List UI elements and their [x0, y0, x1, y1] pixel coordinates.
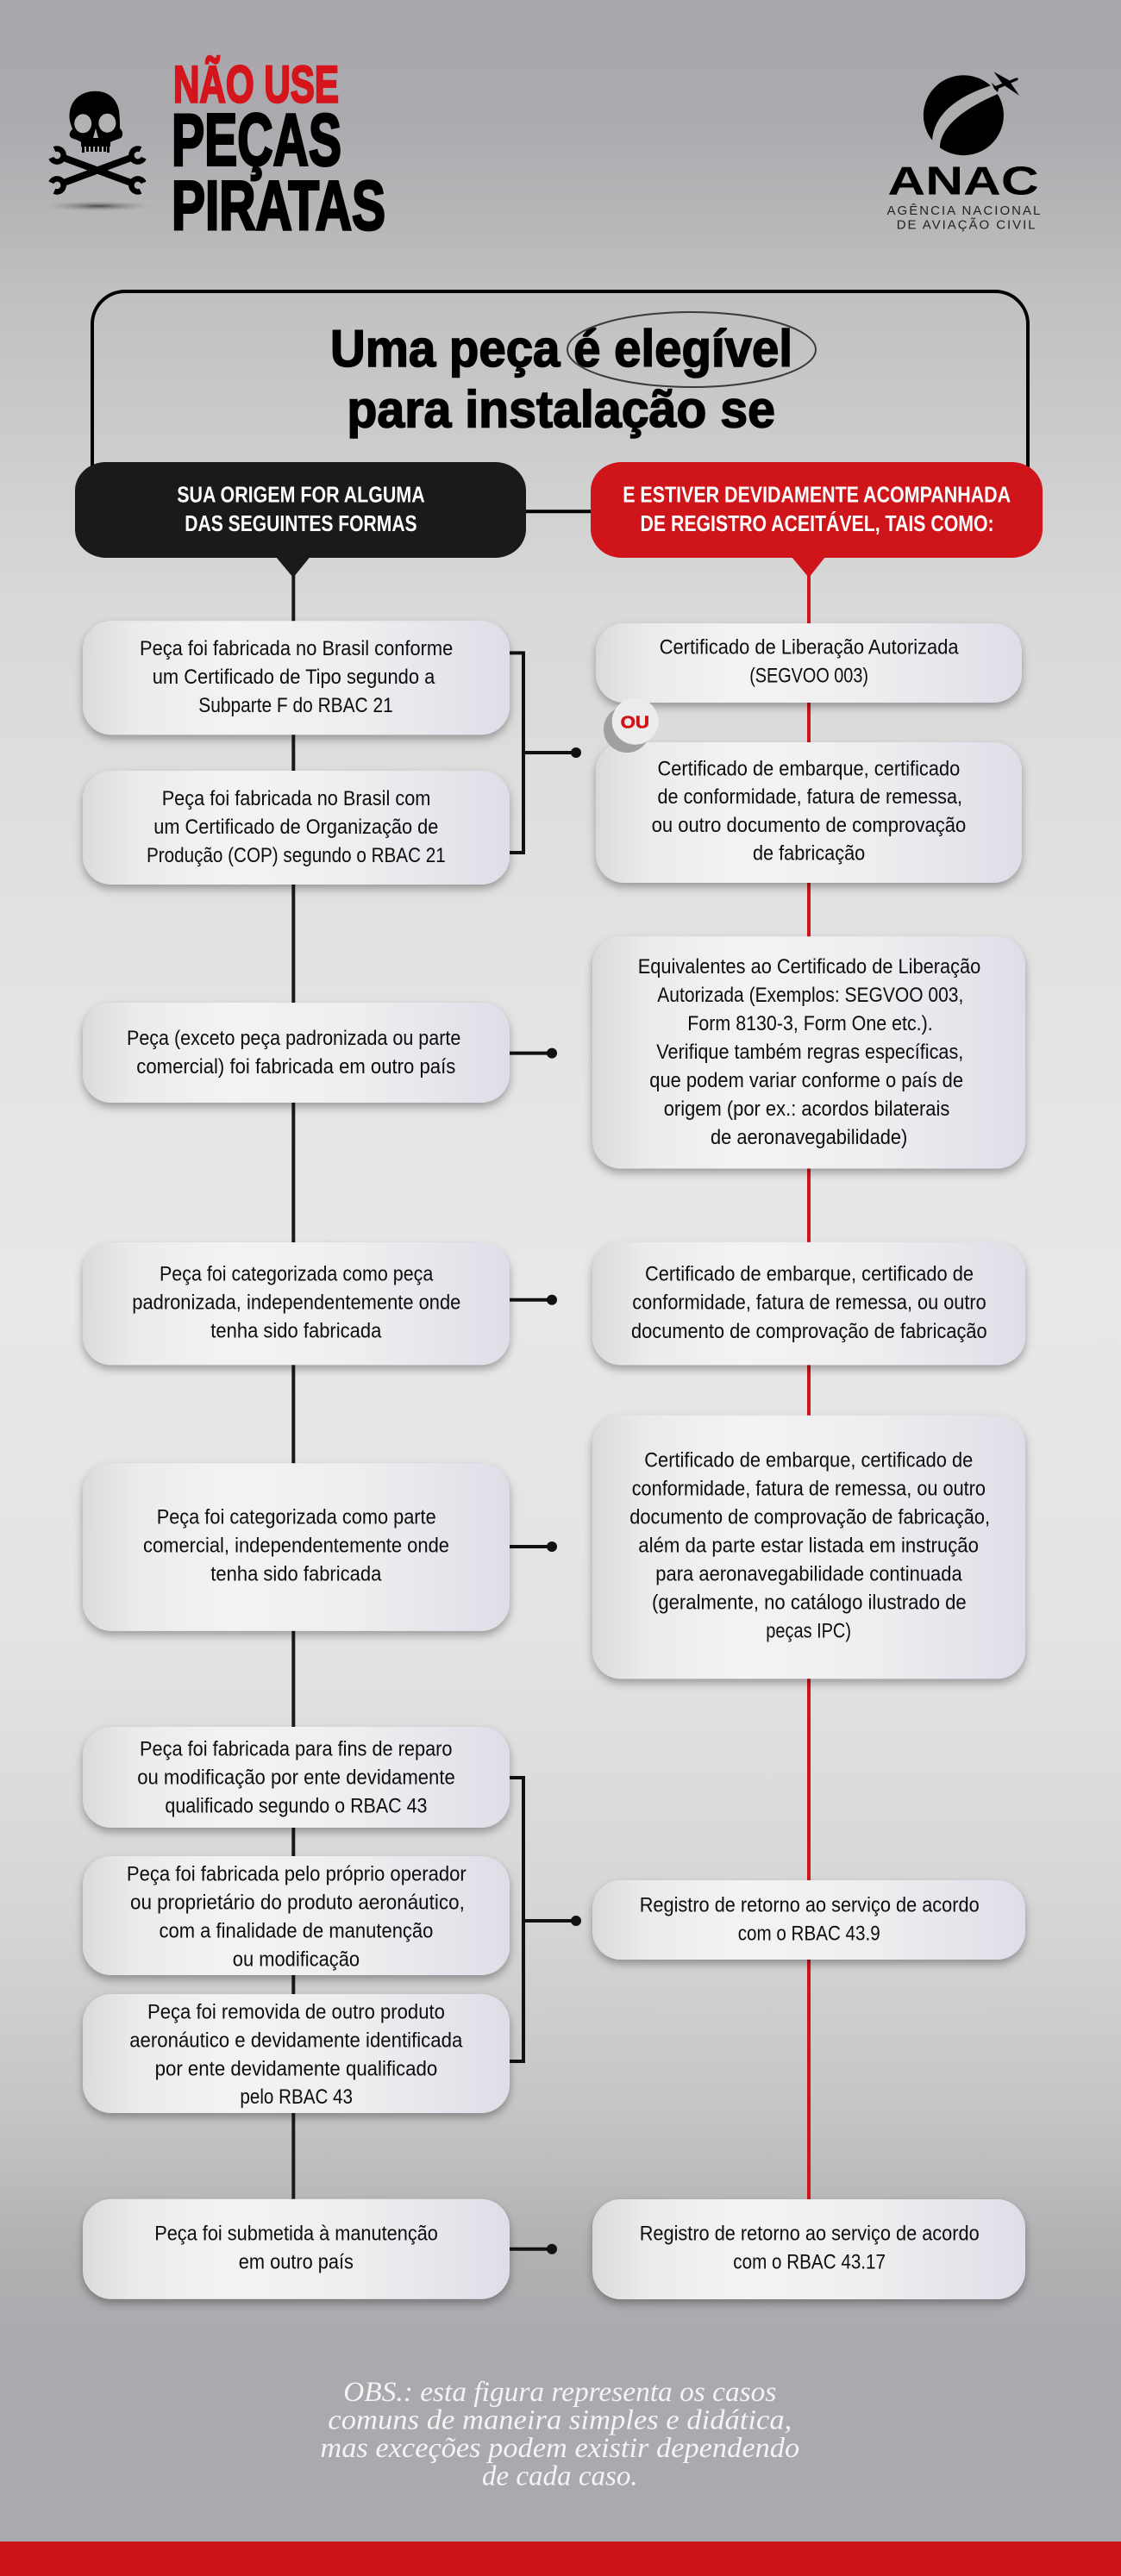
title: [330, 312, 816, 439]
footer band: [0, 2542, 1121, 2576]
header: red: DE REGISTRO ACEITÁVEL, TAIS COMO:: [640, 510, 994, 536]
left box 8: Peça foi removida de outro produto: [147, 2001, 445, 2024]
connector between headers: [517, 510, 604, 513]
left box 3: [83, 1003, 510, 1103]
right box 5: conformidade, fatura de remessa, ou outro: [632, 1477, 986, 1500]
right box 1: (SEGVOO 003): [749, 664, 868, 687]
note: observation: de cada caso.: [482, 2460, 638, 2492]
left spine line: [291, 569, 295, 2207]
note: observation: OBS.: esta figura representa os casos: [343, 2377, 776, 2408]
right box 6: com o RBAC 43.9: [738, 1923, 880, 1946]
left box 5: tenha sido fabricada: [210, 1562, 382, 1585]
header: red: [591, 462, 1043, 578]
left box 5: [83, 1463, 510, 1631]
left box 7: Peça foi fabricada pelo próprio operador: [127, 1862, 467, 1885]
left box 8: por ente devidamente qualificado: [155, 2057, 437, 2080]
title: Uma peça é elegível: [330, 320, 792, 378]
right box 2: [596, 742, 1022, 883]
icon: globe with plane: [924, 72, 1019, 155]
left box 6: ou modificação por ente devidamente: [137, 1766, 455, 1789]
left box 6: [83, 1727, 510, 1828]
logo: não use peças piratas: [45, 55, 385, 245]
left box 8: aeronáutico e devidamente identificada: [129, 2029, 463, 2052]
left box 4: Peça foi categorizada como peça: [160, 1263, 434, 1286]
left box 9: [83, 2199, 510, 2299]
right box 3: Verifique também regras específicas,: [656, 1041, 963, 1064]
left box 3: comercial) foi fabricada em outro país: [136, 1055, 455, 1079]
left box 2: [83, 771, 510, 885]
badge: OU: OU: [621, 713, 649, 732]
right box 5: (geralmente, no catálogo ilustrado de: [652, 1591, 967, 1614]
right box 2: de fabricação: [753, 842, 865, 866]
connector: outro país: [510, 1048, 557, 1059]
left box 4: [83, 1242, 510, 1365]
title: para instalação se: [347, 381, 775, 439]
left box 2: Produção (COP) segundo o RBAC 21: [147, 844, 446, 867]
connector: parte comercial: [510, 1541, 557, 1552]
right box 4: conformidade, fatura de remessa, ou outro: [632, 1291, 986, 1315]
right box 5: peças IPC): [766, 1619, 851, 1642]
logo text: [172, 55, 385, 245]
left box 7: com a finalidade de manutenção: [159, 1919, 433, 1942]
note: observation: [320, 2377, 799, 2492]
ANAC wordmark: [886, 159, 1040, 233]
ANAC wordmark: ANAC: [887, 159, 1039, 203]
logo text: PEÇAS: [172, 100, 341, 182]
right box 2: de conformidade, fatura de remessa,: [657, 785, 962, 809]
right box 2: Certificado de embarque, certificado: [657, 757, 960, 780]
right box 7: com o RBAC 43.17: [733, 2250, 886, 2273]
right box 5: além da parte estar listada em instrução: [638, 1534, 979, 1557]
left box 5: comercial, independentemente onde: [143, 1535, 449, 1558]
connector: padronizada: [510, 1295, 557, 1305]
logo text: PIRATAS: [172, 167, 385, 245]
ANAC wordmark: AGÊNCIA NACIONAL: [886, 203, 1040, 218]
left box 1: Peça foi fabricada no Brasil conforme: [140, 637, 453, 660]
left box 1: Subparte F do RBAC 21: [198, 694, 393, 717]
badge: OU: [604, 698, 659, 753]
right box 6: Registro de retorno ao serviço de acordo: [640, 1894, 980, 1917]
right box 2: ou outro documento de comprovação: [652, 814, 966, 837]
left box 5: Peça foi categorizada como parte: [157, 1506, 436, 1529]
right box 5: Certificado de embarque, certificado de: [644, 1448, 973, 1472]
header: black: SUA ORIGEM FOR ALGUMA: [177, 481, 425, 507]
note: observation: mas exceções podem existir dependendo: [320, 2433, 799, 2464]
left box 1: um Certificado de Tipo segundo a: [153, 666, 435, 689]
right box 1: Certificado de Liberação Autorizada: [660, 635, 959, 659]
panel frame: [92, 291, 1028, 483]
right box 5: para aeronavegabilidade continuada: [655, 1562, 962, 1585]
left box 2: Peça foi fabricada no Brasil com: [162, 787, 430, 810]
header: black: DAS SEGUINTES FORMAS: [185, 510, 417, 536]
right box 3: Equivalentes ao Certificado de Liberação: [638, 955, 980, 979]
right box 4: Certificado de embarque, certificado de: [645, 1263, 974, 1286]
bracket: Brasil group: [510, 653, 581, 853]
right box 3: Autorizada (Exemplos: SEGVOO 003,: [657, 984, 963, 1007]
right box 4: [592, 1242, 1025, 1365]
right box 3: [592, 936, 1025, 1169]
left box 6: Peça foi fabricada para fins de reparo: [140, 1738, 452, 1761]
right box 4: documento de comprovação de fabricação: [631, 1320, 987, 1343]
ANAC wordmark: DE AVIAÇÃO CIVIL: [897, 218, 1036, 233]
header: black: [75, 462, 526, 578]
right box 3: origem (por ex.: acordos bilaterais: [664, 1097, 949, 1121]
right box 3: que podem variar conforme o país de: [649, 1069, 963, 1092]
right box 5: [592, 1416, 1025, 1679]
header: red: E ESTIVER DEVIDAMENTE ACOMPANHADA: [623, 481, 1011, 507]
left box 8: [83, 1994, 510, 2113]
logo: ANAC: [886, 72, 1040, 233]
left box 9: Peça foi submetida à manutenção: [154, 2223, 438, 2246]
right box 5: documento de comprovação de fabricação,: [629, 1505, 990, 1529]
icon: skull and crossed wrenches: [45, 91, 152, 211]
right box 3: Form 8130-3, Form One etc.).: [687, 1012, 933, 1035]
left box 7: ou proprietário do produto aeronáutico,: [130, 1891, 465, 1915]
left box 1: [83, 621, 510, 735]
left box 2: um Certificado de Organização de: [153, 816, 438, 839]
logo text: NÃO USE: [173, 55, 339, 113]
right box 7: [592, 2199, 1025, 2299]
left box 7: ou modificação: [233, 1948, 360, 1971]
bracket: reparo group: [510, 1778, 581, 2061]
left box 6: qualificado segundo o RBAC 43: [165, 1794, 428, 1817]
right box 6: [592, 1880, 1025, 1960]
right box 1: [596, 623, 1022, 703]
connector: manutenção em outro país: [510, 2244, 557, 2254]
left box 3: Peça (exceto peça padronizada ou parte: [127, 1027, 460, 1050]
right spine line: [807, 569, 811, 2207]
left box 4: padronizada, independentemente onde: [132, 1291, 460, 1315]
left box 4: tenha sido fabricada: [210, 1319, 382, 1342]
left box 8: pelo RBAC 43: [240, 2085, 353, 2109]
note: observation: comuns de maneira simples e didática,: [328, 2405, 792, 2436]
right box 3: de aeronavegabilidade): [711, 1126, 907, 1149]
left box 9: em outro país: [239, 2251, 354, 2274]
right box 7: Registro de retorno ao serviço de acordo: [640, 2222, 980, 2245]
left box 7: [83, 1856, 510, 1975]
